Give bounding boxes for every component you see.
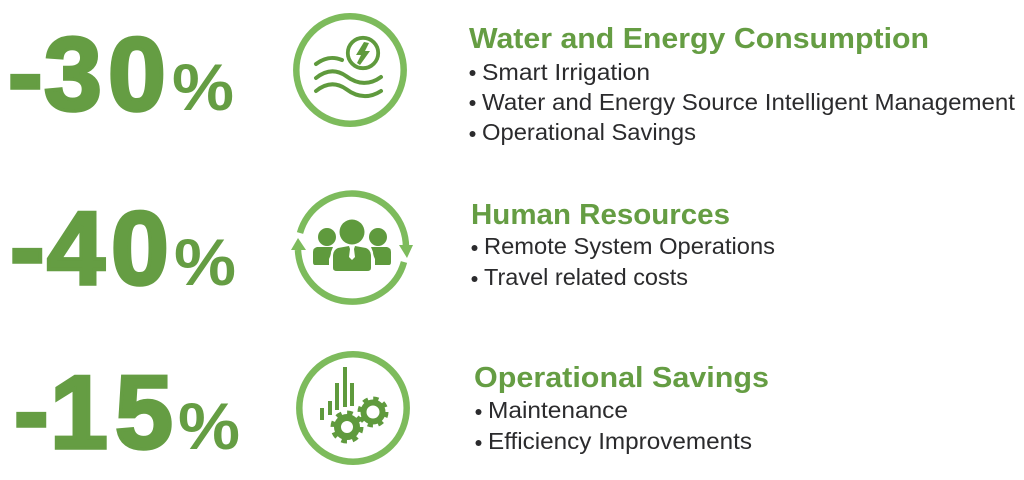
text: water and energy consumption <box>469 23 1016 145</box>
text: operational savings: Operational Savings <box>474 362 769 394</box>
text: operational savings <box>474 362 769 454</box>
stat: -30%: % <box>172 50 234 124</box>
text: water and energy consumption: Water and Energy Source Intelligent Management <box>482 89 1016 115</box>
text: operational savings: Efficiency Improvements <box>488 428 752 454</box>
stat: -40%: % <box>174 225 236 299</box>
text: operational savings: Maintenance <box>488 397 628 423</box>
row: human resources <box>10 190 775 307</box>
stat: -30%: -30 <box>8 16 166 133</box>
icon: water and energy <box>296 16 404 124</box>
stat: -15%: -15 <box>14 354 173 471</box>
text: human resources: Human Resources <box>471 199 730 231</box>
stat: -15%: % <box>178 389 240 463</box>
row: water and energy <box>8 16 1016 145</box>
text: water and energy consumption: Water and Energy Consumption <box>469 23 929 55</box>
text: water and energy consumption: Operational Savings <box>482 119 696 145</box>
icon: human resources <box>291 194 413 302</box>
text: water and energy consumption: Smart Irrigation <box>482 59 650 85</box>
stat: -30% <box>8 16 234 133</box>
icon: operational savings <box>299 354 407 462</box>
text: human resources: Travel related costs <box>484 264 688 290</box>
text: human resources: Remote System Operations <box>484 233 775 259</box>
text: human resources <box>471 199 775 290</box>
row: operational savings <box>14 354 769 471</box>
stat: -40%: -40 <box>10 190 169 307</box>
